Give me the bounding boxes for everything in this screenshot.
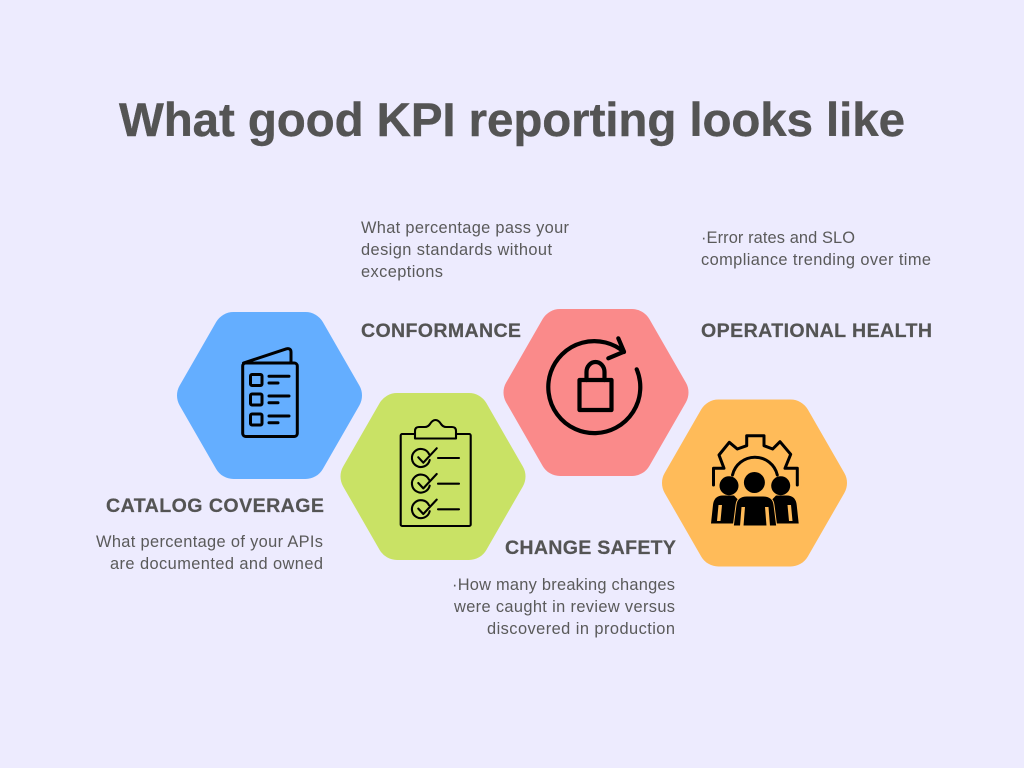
text block: conformance: What percentage pass your [361, 219, 570, 237]
icon: catalog booklet [243, 349, 297, 436]
text block: change safety [452, 537, 676, 638]
hexagon: operational health [682, 420, 827, 546]
text block: catalog coverage: CATALOG COVERAGE [106, 495, 324, 517]
text block: catalog coverage: are documented and owned [110, 555, 323, 573]
text block: change safety: were caught in review versus [453, 598, 675, 616]
hexagon: conformance [524, 329, 668, 456]
text block: conformance: CONFORMANCE [361, 320, 521, 342]
text block: operational health [701, 229, 932, 342]
text block: change safety: discovered in production [487, 620, 675, 638]
text block: change safety: ·How many breaking changes [452, 576, 675, 594]
icon: checklist clipboard [401, 420, 471, 526]
text block: conformance: exceptions [361, 263, 443, 281]
text block: operational health: compliance trending over time [701, 251, 931, 269]
text block: conformance: design standards without [361, 241, 552, 259]
icon: lock with rotating arrow [548, 338, 640, 433]
text block: conformance [361, 219, 570, 342]
text block: operational health: ·Error rates and SLO [701, 229, 855, 247]
hexagon: catalog coverage [197, 332, 342, 459]
text block: change safety: CHANGE SAFETY [505, 537, 676, 559]
text block: catalog coverage: What percentage of your APIs [96, 533, 323, 551]
icon: team with gear [711, 436, 799, 526]
text block: operational health: OPERATIONAL HEALTH [701, 320, 932, 342]
hexagon: change safety [360, 413, 506, 540]
text block: catalog coverage [96, 495, 324, 573]
title: What good KPI reporting looks like [119, 94, 905, 147]
